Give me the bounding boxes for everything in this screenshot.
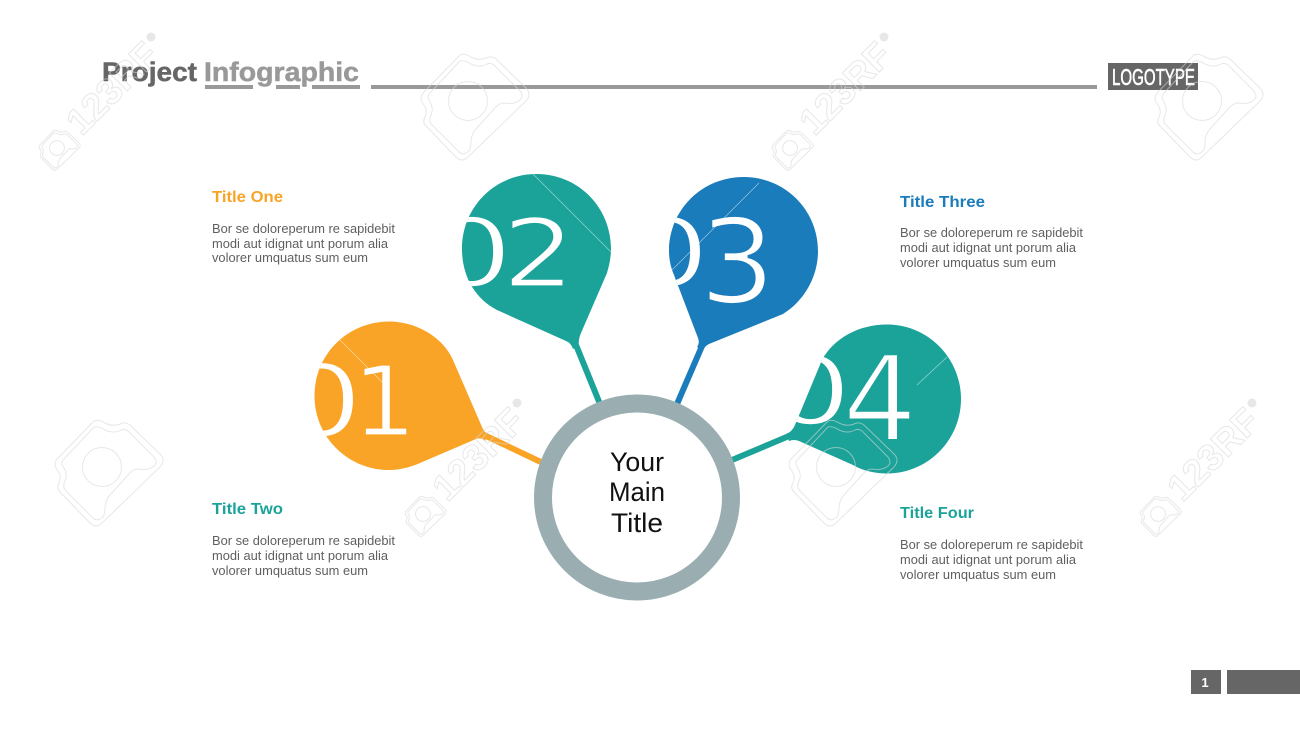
page number: 1 [1201,675,1209,690]
text block: title one: Bor se doloreperum re sapidebit [212,221,395,236]
pin 04 [786,324,961,474]
text block: title two [212,501,395,578]
pin 03: 3 [699,195,776,332]
watermark wordmarks: 123RF [791,34,899,142]
central hub [543,404,731,592]
pin 01: 1 [352,347,417,459]
central hub: Your [610,447,664,477]
text block: title one: volorer umquatus sum eum [212,250,368,265]
pin 01 [314,322,486,470]
text block: title three: volorer umquatus sum eum [900,255,1056,270]
pin 02 [462,174,611,349]
pin 04: 0 [768,337,852,447]
header rule [371,85,1097,89]
pin 03 [669,177,818,348]
pin 03: 0 [626,199,710,309]
title: Project [102,57,197,87]
text block: title four: Bor se doloreperum re sapidebit [900,537,1083,552]
logotype badge: LOGOTYPE [1112,64,1195,90]
text block: title three [900,194,1083,270]
pin 02: 0 [429,199,513,309]
text block: title three: Title Three [900,194,985,211]
page number [1191,670,1221,694]
text block: title four: volorer umquatus sum eum [900,567,1056,582]
text block: title two: Bor se doloreperum re sapidebit [212,533,395,548]
connector: pin 2 to hub [576,345,600,404]
watermark wordmarks: 123RF [424,400,532,508]
central hub: Main [609,477,665,507]
title [102,57,360,89]
text block: title three: modi aut idignat unt porum alia [900,240,1077,255]
text block: title two: volorer umquatus sum eum [212,563,368,578]
text block: title four: Title Four [900,505,974,522]
title: Infographic [204,57,359,87]
text block: title four [900,505,1083,582]
watermark wordmarks: 123RF [1159,400,1267,508]
connector: pin 1 to hub [484,435,543,463]
page footer bar [1227,670,1300,694]
watermark wordmarks [39,33,1267,536]
text block: title two: Title Two [212,501,283,518]
central hub: Title [611,508,663,538]
connector: pin 4 to hub [732,436,789,460]
watermark icons [55,54,1263,526]
text block: title one [212,189,395,265]
pin 04: 4 [842,330,917,469]
text block: title one: modi aut idignat unt porum alia [212,236,389,251]
text block: title four: modi aut idignat unt porum alia [900,552,1077,567]
text block: title three: Bor se doloreperum re sapidebit [900,225,1083,240]
text block: title two: modi aut idignat unt porum alia [212,548,389,563]
pin 02: 2 [502,199,575,309]
logotype badge [1108,63,1198,90]
watermark wordmarks: 123RF [58,34,166,142]
connector: pin 3 to hub [677,346,702,404]
text block: title one: Title One [212,189,283,206]
pin 01: 0 [279,343,363,460]
